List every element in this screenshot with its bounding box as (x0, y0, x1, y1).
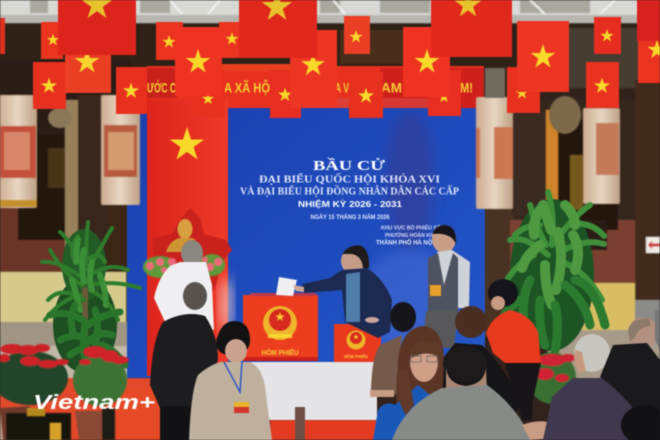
flag (41, 22, 63, 59)
red carpet floor (0, 378, 378, 440)
flag (290, 30, 337, 108)
person: man in black hooded jacket (600, 310, 660, 440)
heading: election title: ĐẠI BIỂU QUỐC HỘI KHÓA XVI (259, 172, 440, 186)
flag (349, 72, 383, 118)
lantern 4 (583, 108, 620, 204)
red banner with slogan: M! (460, 80, 473, 96)
flag (58, 0, 136, 55)
person: old man in plaid shirt (543, 334, 632, 440)
heading: election title: VÀ ĐẠI BIỂU HỘI ĐỒNG NHÂN DÂN CÁC CẤP (240, 184, 459, 198)
person: woman in beige ao dai (189, 321, 272, 440)
ballot box large (243, 293, 318, 361)
stanchion post (295, 407, 305, 440)
flag (33, 62, 66, 109)
poinsettia center (73, 346, 129, 406)
lantern 3 (476, 97, 513, 209)
hanging flags (0, 0, 660, 118)
ballot box small (334, 324, 381, 362)
flag (0, 18, 5, 54)
flag (116, 67, 147, 114)
flag (637, 0, 660, 41)
person: man in brown t-shirt (370, 302, 416, 397)
pots (0, 406, 30, 440)
flag (403, 27, 450, 97)
person: man in dark jacket (440, 306, 518, 420)
flag (638, 40, 660, 83)
flower garland (143, 254, 225, 278)
flag (507, 67, 540, 113)
heading: election title: THÀNH PHỐ HÀ NỘI (376, 238, 434, 246)
wall sign with arrow (646, 237, 660, 253)
flag (175, 27, 222, 96)
poinsettias and pots (0, 344, 576, 440)
hand (522, 421, 561, 440)
ballot box small: HÒM PHIẾU (344, 352, 369, 359)
heading: election title: NGÀY 15 THÁNG 3 NĂM 2026 (310, 214, 390, 221)
person: woman with glasses in blue shirt (373, 326, 444, 440)
statue bust on red map (152, 208, 232, 300)
flag (219, 22, 240, 58)
lantern 2 (101, 95, 140, 205)
flag (65, 49, 111, 93)
white podium (245, 362, 377, 420)
flag (344, 16, 370, 54)
red panel with star (147, 100, 232, 376)
left wall (0, 60, 130, 240)
person: man in grey jacket (392, 346, 530, 440)
poinsettia right (528, 352, 576, 404)
red banner with slogan: A V (335, 80, 349, 96)
emblem (263, 306, 297, 340)
hanging lanterns (0, 68, 620, 209)
flag (156, 22, 183, 60)
red banner with slogan: AM (381, 80, 402, 96)
right plant (502, 192, 605, 351)
lantern 1 (0, 95, 37, 208)
red banner with slogan: ƯỚC C (147, 78, 176, 96)
flag (594, 17, 621, 54)
person: man in red jacket (486, 279, 541, 420)
person: man in black suit (150, 282, 218, 440)
ballot paper (276, 277, 297, 296)
heading: election title: BẦU CỬ (313, 158, 385, 173)
heading: election title: NHIỆM KỲ 2026 - 2031 (298, 200, 403, 209)
flag (191, 70, 225, 117)
flag (270, 70, 301, 118)
heading: election title: PHƯỜNG HOÀN KIẾM (385, 231, 439, 239)
flag (239, 0, 317, 58)
flag (428, 70, 461, 116)
watermark logo: Vietnam+ (33, 392, 155, 414)
heading: election title (240, 158, 459, 246)
ballot box large: HÒM PHIẾU (262, 347, 298, 357)
left plant (42, 222, 140, 390)
flag (517, 21, 569, 92)
flag (431, 0, 512, 57)
flag (586, 62, 619, 108)
heading: election title: KHU VỰC BỎ PHIẾU SỐ (381, 224, 441, 232)
carved bracket decor (549, 96, 581, 134)
person: man in white shirt (154, 240, 214, 330)
blue backdrop with text (127, 108, 485, 378)
red banner with slogan (147, 64, 484, 108)
poinsettia left (0, 344, 69, 405)
person: official in grey vest (424, 225, 470, 348)
person: voter in navy jacket (293, 245, 392, 338)
right wall (484, 100, 660, 330)
red banner with slogan: A XÃ HỘ (224, 78, 270, 96)
